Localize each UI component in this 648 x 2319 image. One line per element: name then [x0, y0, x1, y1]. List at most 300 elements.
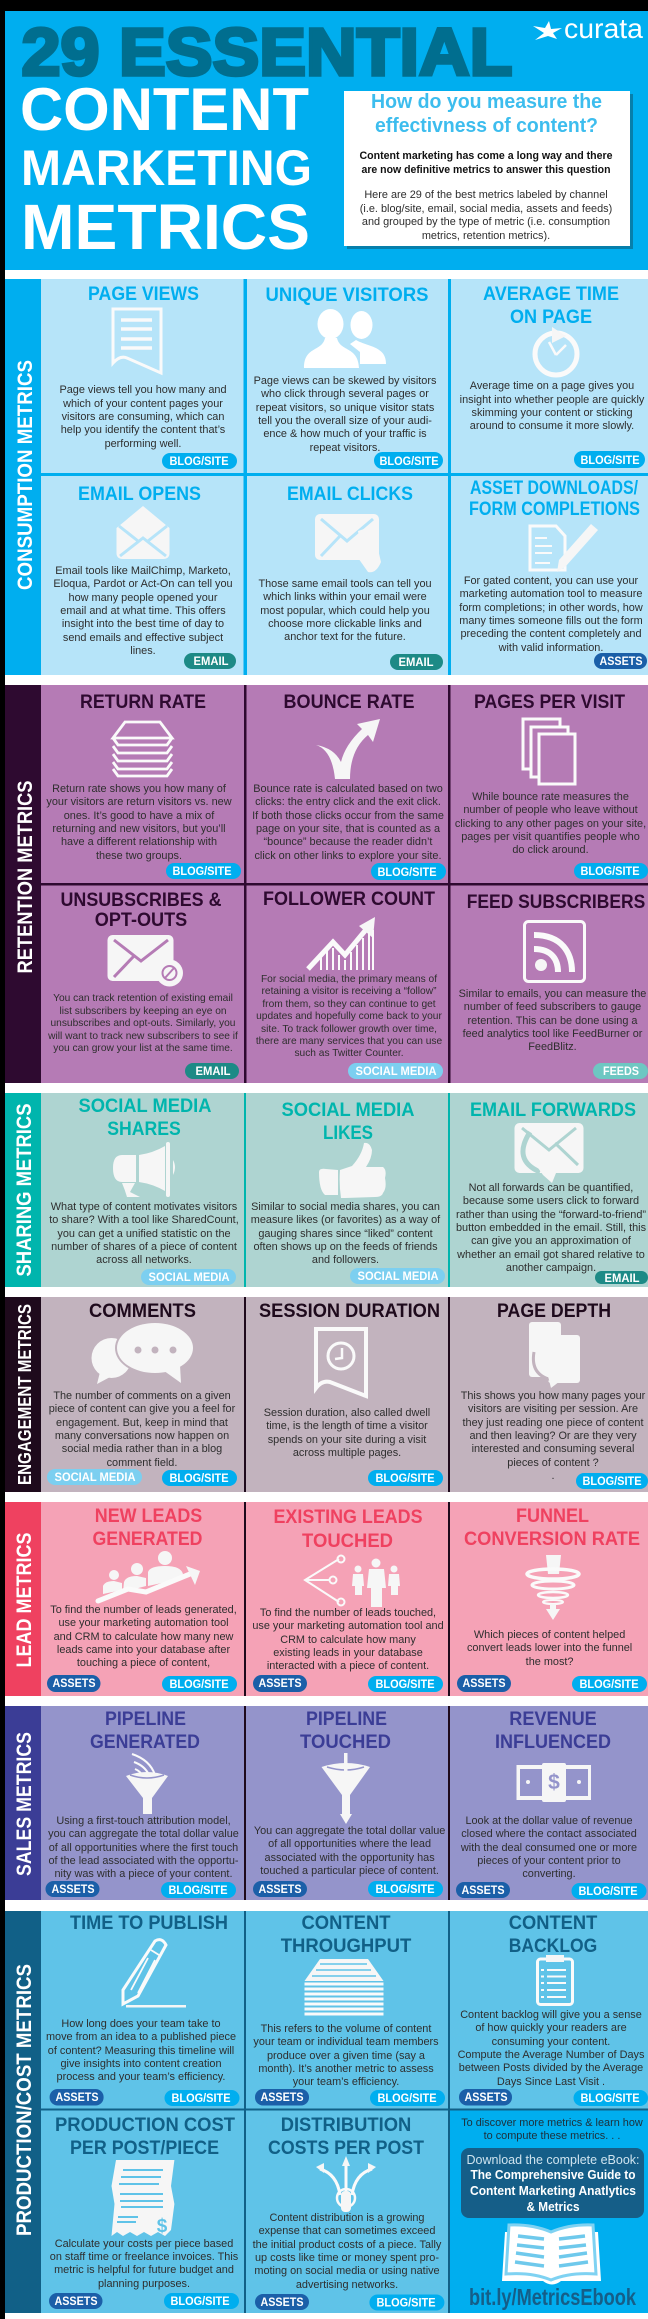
heading: SOCIAL MEDIA — [78, 1096, 212, 1117]
card: email clicks — [258, 484, 443, 670]
heading — [281, 1913, 412, 1957]
heading: NEW LEADS — [95, 1506, 202, 1527]
description: updates and hopefully come back to your — [256, 1011, 442, 1022]
channel tag — [162, 453, 237, 469]
heading: DISTRIBUTION — [281, 2115, 411, 2136]
panel: engagement metrics — [5, 1297, 648, 1492]
description: Email tools like MailChimp, Marketo, — [55, 565, 231, 577]
intro callout box — [344, 91, 633, 249]
heading: AVERAGE TIME — [483, 284, 619, 305]
channel tag: ASSETS — [600, 655, 643, 668]
icon: money bills — [516, 1763, 591, 1802]
description: lines. — [130, 645, 156, 657]
channel tag — [572, 1676, 647, 1692]
channel tag: BLOG/SITE — [582, 1475, 642, 1488]
description: and then leaving? Or are they very — [469, 1430, 637, 1442]
description: If both those clicks occur from the same — [252, 810, 444, 822]
description: unsubscribes and opt-outs. Similarly, you — [51, 1018, 235, 1029]
section label: SHARING METRICS — [13, 1104, 36, 1276]
intro callout box: How do you measure the — [371, 91, 602, 113]
heading: REVENUE — [509, 1709, 597, 1730]
description: Return rate shows you how many of — [52, 783, 227, 795]
channel tag: ASSETS — [52, 1883, 95, 1896]
heading: CONVERSION RATE — [464, 1529, 640, 1550]
description: Page views can be skewed by visitors — [254, 375, 437, 387]
description: across all networks. — [96, 1254, 192, 1266]
icon: funnel rings — [527, 1555, 579, 1620]
icon: megaphone — [113, 1142, 175, 1197]
icon: stack of pages — [113, 722, 172, 776]
ebook title box: & Metrics — [526, 2199, 580, 2214]
channel tag: ASSETS — [52, 1677, 96, 1690]
heading: PIPELINE — [306, 1709, 387, 1730]
description: you can grow your list at the same time. — [53, 1043, 233, 1054]
heading — [495, 1709, 611, 1753]
icon: page with clock — [316, 1329, 366, 1396]
heading: EMAIL OPENS — [78, 484, 201, 505]
description: many conversations now happen on — [55, 1430, 229, 1442]
card: email forwards — [456, 1100, 648, 1285]
channel tag: EMAIL — [194, 655, 228, 668]
description: Those same email tools can tell you — [258, 578, 432, 590]
description: leads came into your database after — [57, 1644, 230, 1656]
description: converting. — [522, 1868, 576, 1880]
description: up costs like time or money spent pro- — [255, 2252, 439, 2264]
description: The number of comments on a given — [53, 1390, 231, 1402]
description: who click through several pages or — [260, 388, 429, 400]
channel tag: ASSETS — [462, 1677, 506, 1690]
description: most popular, which could help you — [260, 605, 430, 617]
description: and CRM to calculate how many new — [54, 1631, 234, 1643]
description: with the deal consumed one or more — [460, 1842, 637, 1854]
intro callout box: effectivness of content? — [375, 115, 598, 137]
heading: SHARES — [107, 1119, 181, 1140]
description: marketing automation tool to measure — [460, 588, 642, 600]
description: Which pieces of content helped — [474, 1629, 625, 1641]
icon: clock — [535, 327, 577, 375]
icon: two people — [304, 307, 386, 368]
description: number of shares of a piece of content — [51, 1241, 237, 1253]
heading: CONTENT — [509, 1913, 598, 1934]
description: clicking to any other pages on your site, — [455, 818, 646, 830]
description: How long does your team take to — [61, 2018, 221, 2030]
heading — [282, 1100, 415, 1144]
channel tag — [47, 1675, 100, 1692]
card: follower count — [256, 889, 443, 1079]
intro callout box: (i.e. blog/site, email, social media, assets and feeds) — [360, 203, 612, 215]
description: pages per visit quantifies people who — [461, 831, 640, 843]
description: feed analytics tool like FeedBurner or — [463, 1028, 643, 1040]
channel tag: SOCIAL MEDIA — [358, 1270, 439, 1283]
heading: PRODUCTION COST — [55, 2115, 235, 2136]
heading: OPT-OUTS — [95, 910, 187, 931]
description: engagement. But, keep in mind that — [56, 1417, 228, 1429]
description: you can get a unified statistic on the — [57, 1228, 231, 1240]
description: touched a particular piece of content. — [260, 1865, 439, 1877]
card: asset downloads / form completions — [459, 478, 647, 669]
heading: PAGE DEPTH — [497, 1301, 611, 1322]
channel tag: BLOG/SITE — [168, 1884, 228, 1897]
description: Similar to emails, you can measure the — [459, 988, 646, 1000]
channel tag: ASSETS — [54, 2295, 98, 2308]
description: will want to track new subscribers to see if — [47, 1031, 238, 1042]
channel tag — [574, 863, 648, 879]
channel tag — [162, 1676, 237, 1692]
channel tag: BLOG/SITE — [376, 1678, 435, 1691]
description: Eloqua, Pardot or Act-On can tell you — [53, 578, 233, 590]
heading: RETURN RATE — [80, 692, 206, 713]
description: across multiple pages. — [293, 1447, 401, 1459]
heading: COMMENTS — [89, 1301, 196, 1322]
description: Not all forwards can be quantified, — [469, 1182, 633, 1194]
intro callout box: and grouped by the type of metric (i.e. consumption — [362, 216, 610, 228]
logo: curata: curata — [564, 13, 643, 44]
description: CRM to calculate how many — [280, 1634, 416, 1646]
icon: nodes and people — [305, 1556, 400, 1607]
description: process and your team’s efficiency. — [57, 2071, 225, 2083]
channel tag — [370, 2090, 445, 2106]
section label: RETENTION METRICS — [14, 780, 37, 974]
description: Days Since Last Visit . — [497, 2076, 605, 2088]
channel tag — [369, 2294, 444, 2310]
heading — [90, 1709, 200, 1753]
channel tag: BLOG/SITE — [380, 455, 439, 468]
section label: ENGAGEMENT METRICS — [15, 1304, 35, 1485]
description: convert leads lower into the funnel — [467, 1642, 632, 1654]
heading: GENERATED — [90, 1732, 200, 1753]
title: 29 ESSENTIAL — [22, 15, 512, 90]
description: of the lead associated with the opportu- — [48, 1855, 239, 1867]
card: social media likes — [251, 1100, 445, 1284]
channel tag: BLOG/SITE — [376, 1883, 435, 1896]
icon: funnel with signal — [126, 1754, 168, 1814]
description: “bounce” because the reader didn’t — [264, 836, 432, 848]
description: button embedded in the email. Still, this — [456, 1222, 647, 1234]
heading: CONTENT — [302, 1913, 391, 1934]
description: Page views tell you how many and — [59, 384, 227, 396]
description: Content backlog will give you a sense — [460, 2009, 642, 2021]
heading: THROUGHPUT — [281, 1936, 412, 1957]
card: email opens — [53, 484, 236, 669]
intro callout box: are now definitive metrics to answer this question — [362, 164, 611, 176]
description: month). It’s another metric to assess — [258, 2063, 434, 2075]
card: unique visitors — [254, 285, 443, 469]
icon: large stack of pages — [304, 1959, 384, 2014]
icon: pencil — [123, 1940, 186, 2008]
callout: ebook download — [450, 2110, 648, 2313]
description: To find the number of leads touched, — [260, 1607, 436, 1619]
channel tag: BLOG/SITE — [378, 866, 437, 879]
description: email and at what time. This offers — [60, 605, 226, 617]
icon: bounce arrow — [316, 719, 380, 779]
card: return rate — [46, 692, 241, 879]
panel: sales metrics — [5, 1706, 648, 1900]
title: METRICS — [21, 191, 310, 263]
description: skimming your content or sticking — [472, 407, 632, 419]
channel tag — [255, 2294, 309, 2310]
description: do click around. — [512, 844, 589, 856]
description: planning purposes. — [98, 2278, 190, 2290]
channel tag — [593, 1063, 648, 1079]
icon: three pages — [523, 719, 575, 784]
description: What type of content motivates visitors — [51, 1201, 238, 1213]
icon: thumbs up — [319, 1143, 386, 1198]
description: metric is helpful for future budget and — [54, 2264, 234, 2276]
description: touching a piece of content, — [77, 1657, 210, 1669]
description: page on your site, that is counted as a — [256, 823, 441, 835]
heading — [469, 478, 640, 520]
description: Content distribution is a growing — [270, 2212, 424, 2224]
card: new leads generated — [47, 1506, 237, 1692]
description: send emails and effective subject — [63, 632, 223, 644]
channel tag — [457, 1675, 511, 1692]
heading: EXISTING LEADS — [274, 1507, 422, 1528]
heading: FUNNEL — [516, 1506, 589, 1527]
channel tag: ASSETS — [464, 2091, 508, 2104]
description: you can aggregate the total dollar value — [48, 1828, 239, 1840]
ebook title box: Download the complete eBook: — [466, 2152, 640, 2167]
channel tag — [164, 2293, 239, 2309]
description: rather than using the “forward-to-friend” — [456, 1209, 646, 1221]
channel tag: FEEDS — [603, 1065, 639, 1078]
description: form completions; in other words, how — [459, 602, 643, 614]
description: FeedBlitz. — [528, 1041, 577, 1053]
channel tag: ASSETS — [258, 1677, 302, 1690]
panel: consumption metrics — [5, 279, 648, 675]
card: pipeline generated — [46, 1709, 239, 1898]
ebook title box — [461, 2148, 644, 2218]
channel tag: ASSETS — [260, 2296, 304, 2309]
description: often shows up on the feeds of friends — [253, 1241, 438, 1253]
heading: GENERATED — [92, 1529, 202, 1550]
heading — [483, 284, 619, 328]
heading — [509, 1913, 598, 1957]
description: use your marketing automation tool — [58, 1617, 229, 1629]
description: number of feed subscribers to gauge — [464, 1001, 641, 1013]
description: anchor text for the future. — [284, 631, 406, 643]
title: MARKETING — [21, 140, 312, 196]
icon: envelope with block sign — [108, 935, 183, 986]
description: ence & how much of your traffic is — [263, 428, 427, 440]
description: choose more clickable links and — [268, 618, 422, 630]
channel tag: EMAIL — [398, 656, 434, 669]
channel tag — [184, 653, 236, 669]
description: pieces of content ? — [507, 1457, 599, 1469]
intro callout box: Content marketing has come a long way and there — [360, 150, 612, 162]
description: with valid information. — [498, 642, 603, 654]
description: around to consume it more slowly. — [470, 420, 634, 432]
description: number of people who leave without — [463, 804, 638, 816]
card: content backlog — [458, 1913, 648, 2106]
channel tag: BLOG/SITE — [580, 2092, 640, 2105]
icon: page — [113, 309, 161, 373]
description: retaining a visitor is receiving a “follow” — [262, 986, 437, 997]
heading: COSTS PER POST — [268, 2138, 424, 2159]
description: existing leads in your database — [273, 1647, 423, 1659]
channel tag: BLOG/SITE — [378, 2092, 437, 2105]
heading: SOCIAL MEDIA — [282, 1100, 415, 1121]
description: produce over a given time (say a — [267, 2050, 426, 2062]
icon: people on rising arrow — [98, 1551, 200, 1601]
description: whether an email got shared relative to — [456, 1249, 645, 1261]
description: expense that can sometimes exceed — [259, 2225, 435, 2237]
description: This shows you how many pages your — [461, 1390, 646, 1402]
description: consuming your content. — [492, 2036, 610, 2048]
channel tag — [162, 1470, 237, 1486]
description: the initial product costs of a piece. Tally — [253, 2239, 442, 2251]
icon: envelope and hand — [315, 514, 381, 572]
panel: production/cost metrics — [5, 1911, 648, 2313]
channel tag: SOCIAL MEDIA — [356, 1065, 437, 1078]
description: Bounce rate is calculated based on two — [253, 783, 443, 795]
card: bounce rate — [252, 692, 446, 880]
channel tag: ASSETS — [56, 2091, 99, 2104]
channel tag — [368, 1470, 443, 1486]
icon: speech bubbles — [92, 1321, 195, 1384]
card: time to publish — [46, 1913, 240, 2106]
description: because some users click to forward — [463, 1195, 639, 1207]
description: these two groups. — [96, 850, 182, 862]
description: . — [551, 1470, 555, 1482]
channel tag: BLOG/SITE — [170, 2295, 230, 2308]
ebook title box: The Comprehensive Guide to — [470, 2167, 636, 2182]
section label: LEAD METRICS — [13, 1532, 36, 1668]
description: many times someone fills out the form — [459, 615, 643, 627]
description: your team’s efficiency. — [293, 2076, 399, 2088]
heading: UNIQUE VISITORS — [266, 285, 428, 306]
card: existing leads touched — [252, 1507, 444, 1692]
description: clicks: the entry click and the exit click. — [255, 796, 441, 808]
card: pages per visit — [455, 692, 648, 879]
header banner — [5, 11, 648, 270]
description: there are many services that you can use — [256, 1036, 442, 1047]
title: CONTENT — [20, 76, 309, 143]
description: spends on your site during a visit — [268, 1434, 426, 1446]
description: list subscribers by keeping an eye on — [59, 1006, 227, 1017]
channel tag: ASSETS — [462, 1884, 505, 1897]
description: the most? — [526, 1656, 574, 1668]
description: use your marketing automation tool and — [252, 1620, 444, 1632]
channel tag: BLOG/SITE — [580, 865, 640, 878]
channel tag: ASSETS — [258, 1883, 302, 1896]
heading: BACKLOG — [509, 1936, 597, 1957]
icon: open book — [502, 2225, 601, 2284]
heading — [60, 890, 222, 931]
description: You can track retention of existing email — [53, 993, 233, 1004]
channel tag: SOCIAL MEDIA — [54, 1471, 136, 1484]
description: closed where the contact associated — [461, 1828, 637, 1840]
channel tag — [253, 1881, 307, 1897]
card: production cost per post/piece — [49, 2115, 239, 2309]
description: Similar to social media shares, you can — [251, 1201, 440, 1213]
channel tag — [371, 863, 446, 880]
icon: growth chart — [308, 917, 375, 970]
description: they just reading one piece of content — [462, 1417, 644, 1429]
channel tag — [574, 2090, 648, 2106]
channel tag — [368, 1676, 443, 1692]
channel tag: BLOG/SITE — [376, 2296, 436, 2310]
heading: ON PAGE — [510, 307, 592, 328]
heading: TOUCHED — [300, 1732, 391, 1753]
description: of all opportunities where the first touch — [49, 1842, 238, 1854]
heading: EMAIL CLICKS — [287, 484, 413, 505]
heading: PER POST/PIECE — [70, 2138, 219, 2159]
channel tag — [456, 1882, 510, 1898]
channel tag — [185, 1063, 239, 1079]
description: visitors are visiting per session. Are — [468, 1403, 638, 1415]
channel tag — [46, 1881, 100, 1897]
description: retention. This can be done using a — [468, 1015, 638, 1027]
description: which links within your email were — [262, 591, 427, 603]
card: distribution costs per post — [253, 2115, 444, 2310]
description: You can aggregate the total dollar value — [254, 1825, 445, 1837]
heading: PIPELINE — [105, 1709, 186, 1730]
channel tag: BLOG/SITE — [172, 865, 232, 878]
channel tag: BLOG/SITE — [580, 454, 640, 467]
channel tag — [374, 452, 443, 469]
description: For social media, the primary means of — [261, 974, 437, 985]
description: repeat visitors. — [310, 442, 380, 454]
heading: BOUNCE RATE — [284, 692, 414, 713]
intro callout box: Here are 29 of the best metrics labeled by channel — [364, 189, 608, 201]
channel tag — [368, 1881, 443, 1897]
heading: SESSION DURATION — [259, 1301, 440, 1322]
description: ones. It’s good to have a mix of — [64, 810, 215, 822]
description: This refers to the volume of content — [261, 2023, 431, 2035]
description: pieces of your content prior to — [477, 1855, 621, 1867]
description: piece of content can give you a feel for — [49, 1403, 236, 1415]
channel tag: BLOG/SITE — [376, 1472, 435, 1485]
channel tag: SOCIAL MEDIA — [148, 1271, 230, 1284]
description: Average time on a page gives you — [470, 380, 634, 392]
heading: INFLUENCED — [495, 1732, 611, 1753]
channel tag — [459, 2089, 512, 2106]
card: pipeline touched — [253, 1709, 445, 1897]
description: Calculate your costs per piece based — [55, 2238, 233, 2250]
description: social media rather than in a blog — [62, 1443, 222, 1455]
channel tag — [166, 863, 241, 879]
description: insight into the best time of day to — [62, 618, 224, 630]
description: Using a first-touch attribution model, — [56, 1815, 231, 1827]
heading: PAGES PER VISIT — [474, 692, 625, 713]
intro callout box: metrics, retention metrics). — [422, 230, 550, 242]
heading — [92, 1506, 202, 1550]
description: advertising networks. — [296, 2279, 398, 2291]
card: unsubscribes and opt-outs — [47, 890, 239, 1079]
channel tag — [253, 1675, 307, 1692]
heading — [274, 1507, 422, 1552]
description: interacted with a piece of content. — [267, 1660, 429, 1672]
description: your team or individual team members — [253, 2036, 439, 2048]
heading: PAGE VIEWS — [88, 284, 199, 305]
panel: lead metrics — [5, 1502, 648, 1696]
description: which of your content pages your — [62, 398, 223, 410]
channel tag: BLOG/SITE — [170, 1472, 229, 1485]
description: associated with the opportunity has — [265, 1852, 435, 1864]
section label: PRODUCTION/COST METRICS — [13, 1964, 36, 2236]
channel tag: BLOG/SITE — [170, 1678, 229, 1691]
channel tag: BLOG/SITE — [580, 1678, 639, 1691]
icon: receipt: $ — [157, 2216, 168, 2237]
description: between Posts divided by the Average — [459, 2062, 643, 2074]
callout: ebook download: to compute these metrics. . . — [484, 2130, 620, 2142]
section label: SALES METRICS — [13, 1732, 36, 1876]
channel tag: BLOG/SITE — [172, 2092, 231, 2105]
heading: FOLLOWER COUNT — [263, 889, 435, 910]
icon: receipt — [112, 2160, 174, 2237]
description: Compute the Average Number of Days — [458, 2049, 645, 2061]
description: move from an idea to a published piece — [46, 2031, 236, 2043]
